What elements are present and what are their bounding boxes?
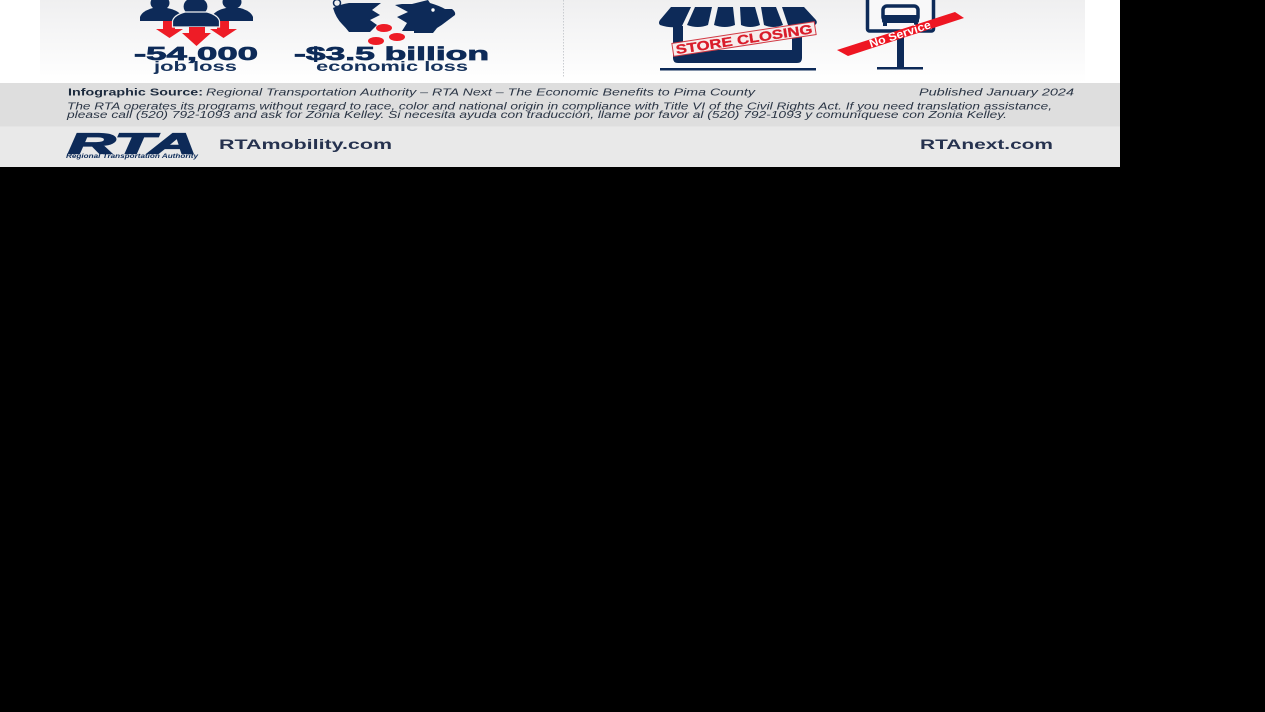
stat: job loss: job loss	[152, 58, 237, 74]
source citation: Regional Transportation Authority – RTA Next – The Economic Benefits to Pima County	[206, 86, 756, 98]
icon: people with down arrows	[140, 0, 253, 46]
stat: economic loss	[294, 43, 489, 74]
stat: job loss: -54,000	[134, 43, 258, 64]
link: RTAnext.com: RTAnext.com	[920, 136, 1053, 152]
icon: bus stop no service	[837, 0, 964, 70]
icon: broken piggy bank	[333, 0, 455, 45]
title VI notice: please call (520) 792-1093 and ask for Zonia Kelley. Si necesita ayuda con traducción, llame por favor al (520) 792-1093 y comuníquese con Zonia Kelley.	[66, 110, 1007, 121]
source line: Infographic Source:	[68, 86, 203, 98]
label: no service: No Service	[868, 19, 933, 51]
logo: RTA: Regional Transportation Authority	[66, 154, 199, 160]
panel: source and notice	[0, 83, 1120, 126]
link: RTAmobility.com: RTAmobility.com	[219, 136, 392, 152]
title VI notice	[66, 102, 1052, 121]
title VI notice: The RTA operates its programs without regard to race, color and national origin in compliance with Title VI of the Civil Rights Act. If you need translation assistance,	[67, 102, 1052, 112]
logo: RTA: RTA	[68, 128, 197, 160]
stat: economic loss: -$3.5 billion	[294, 43, 489, 64]
logo: RTA	[66, 128, 199, 160]
panel: footer	[0, 126, 1120, 167]
stamp: store closing	[672, 21, 816, 58]
stamp: store closing: STORE CLOSING	[675, 21, 813, 57]
panel: economic losses	[40, 0, 1085, 83]
icon: store closing	[659, 7, 817, 70]
publication date: Published January 2024	[919, 86, 1074, 98]
stat: job loss	[134, 43, 258, 74]
stat: economic loss: economic loss	[316, 58, 468, 74]
